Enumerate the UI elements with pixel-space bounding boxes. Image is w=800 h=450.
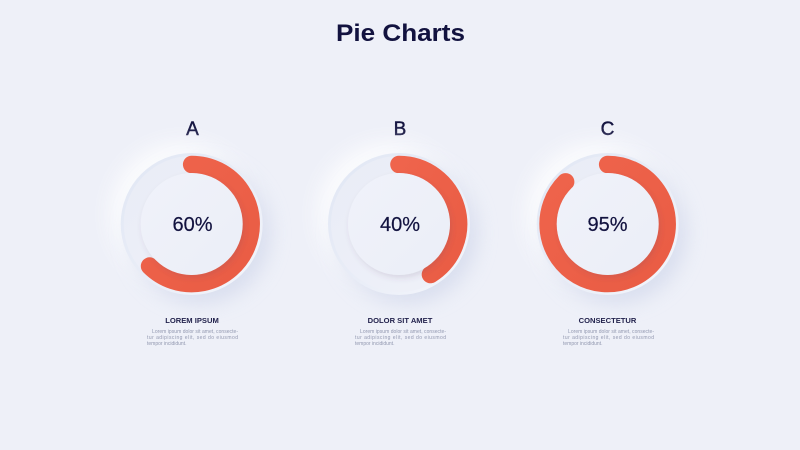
value: 95%: 95% — [587, 214, 628, 236]
panel: chart C — [528, 119, 686, 347]
description C: tempor incididunt. — [563, 341, 602, 347]
description C: Lorem ipsum dolor sit amet, consecte- — [568, 329, 654, 335]
description B: Lorem ipsum dolor sit amet, consecte- — [360, 329, 446, 335]
heading: B: B — [394, 119, 406, 140]
panel: chart B — [319, 119, 477, 347]
heading: C: C — [601, 119, 614, 140]
description A: Lorem ipsum dolor sit amet, consecte- — [152, 329, 238, 335]
donut chart B — [319, 144, 477, 303]
description A: tur adipiscing elit, sed do eiusmod — [147, 335, 238, 341]
title: Pie Charts — [336, 20, 465, 47]
heading: A: A — [186, 119, 199, 140]
description A: tempor incididunt. — [147, 341, 186, 347]
label: Consectetur: CONSECTETUR — [579, 316, 637, 325]
value: 40%: 40% — [380, 214, 420, 236]
description B: tempor incididunt. — [355, 341, 394, 347]
description B: tur adipiscing elit, sed do eiusmod — [355, 335, 446, 341]
donut chart C — [528, 144, 686, 303]
donut chart A — [112, 144, 270, 303]
label: Dolor sit amet: DOLOR SIT AMET — [368, 316, 433, 325]
panel: chart A — [112, 119, 270, 347]
value: 60%: 60% — [172, 214, 213, 236]
description C: tur adipiscing elit, sed do eiusmod — [563, 335, 654, 341]
label: Lorem ipsum: LOREM IPSUM — [165, 316, 219, 325]
